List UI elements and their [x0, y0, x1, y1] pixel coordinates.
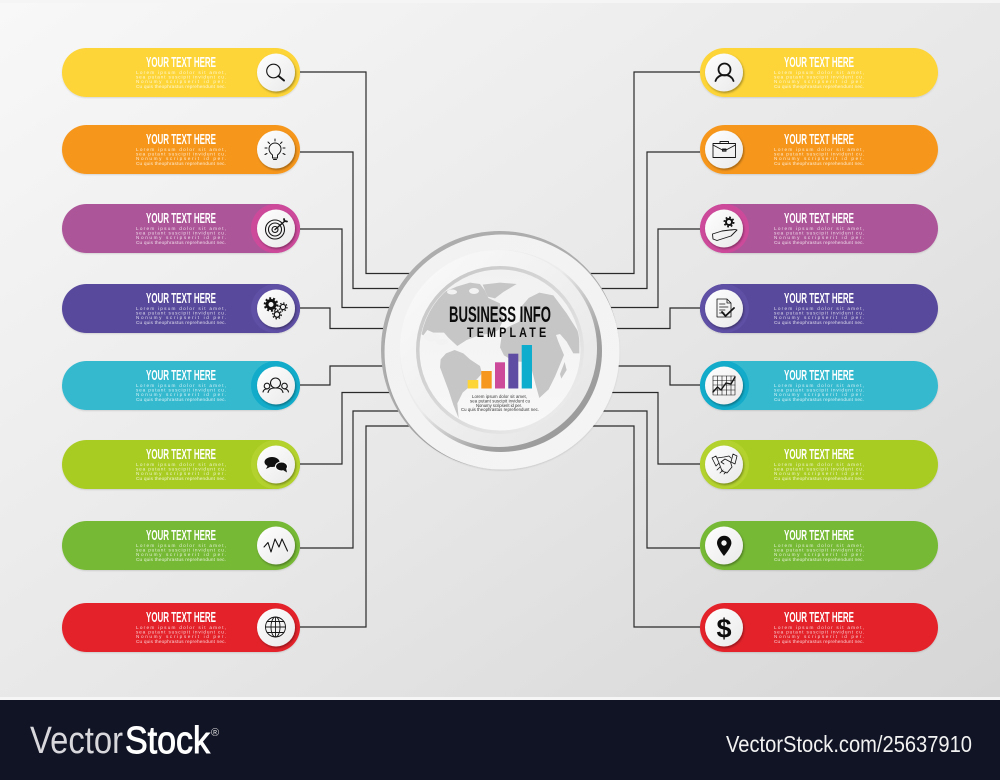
panel: left 7 green: [62, 521, 300, 570]
icon: user: [716, 64, 734, 81]
icon: line graph: [264, 539, 288, 552]
panel: left 1 yellow: Lorem ipsum dolor sit amet,: [136, 70, 226, 75]
footer bar: [0, 700, 1000, 780]
panel: left 3 purple: Cu quis theophrastus reprehendunt nec.: [136, 240, 226, 245]
panel: right 5 teal: Nonumy scripserit id per.: [774, 392, 864, 397]
panel: right 5 teal: YOUR TEXT HERE: [784, 367, 854, 384]
panel: left 4 indigo: Nonumy scripserit id per.: [136, 315, 226, 320]
panel: left 5 teal: Nonumy scripserit id per.: [136, 392, 226, 397]
panel: right 6 lime: [700, 440, 938, 489]
caption: [461, 394, 539, 412]
icon: gears: [265, 298, 287, 319]
icon: dollar sign: $: [716, 614, 732, 644]
registered mark: ®: [211, 727, 219, 739]
panel: left 7 green: Cu quis theophrastus reprehendunt nec.: [136, 557, 226, 562]
panel: left 3 purple: Nonumy scripserit id per.: [136, 235, 226, 240]
connector lines: left: [300, 72, 410, 627]
panel: left 6 lime: Cu quis theophrastus reprehendunt nec.: [136, 476, 226, 481]
panel: left 1 yellow: [62, 48, 300, 97]
panel: right 4 indigo: Lorem ipsum dolor sit amet,: [774, 306, 864, 311]
panel: left 4 indigo: Cu quis theophrastus reprehendunt nec.: [136, 320, 226, 325]
panel: left 6 lime: Nonumy scripserit id per.: [136, 471, 226, 476]
panel: right 2 orange: Cu quis theophrastus reprehendunt nec.: [774, 161, 864, 166]
panel: right 1 yellow: YOUR TEXT HERE: [784, 54, 854, 71]
caption: Nonumy scripserit id per.: [476, 403, 522, 408]
panel: right 3 purple: Lorem ipsum dolor sit amet,: [774, 226, 864, 231]
central hub: [381, 231, 620, 470]
panel: left 2 orange: YOUR TEXT HERE: [146, 131, 216, 148]
panel: left 4 indigo: sea putant suscipit invidunt cu.: [136, 310, 226, 316]
panel: left 3 purple: YOUR TEXT HERE: [146, 210, 216, 227]
panel: right 7 green: Lorem ipsum dolor sit amet,: [774, 543, 864, 548]
panel: left 4 indigo: [62, 284, 300, 333]
panel: left 8 red: Nonumy scripserit id per.: [136, 634, 226, 639]
panel: right 7 green: Cu quis theophrastus reprehendunt nec.: [774, 557, 864, 562]
caption: Lorem ipsum dolor sit amet,: [472, 394, 527, 399]
panel: left 2 orange: [62, 125, 300, 174]
panel: left 4 indigo: YOUR TEXT HERE: [146, 290, 216, 307]
map highlights: [447, 288, 479, 294]
panel: left 8 red: YOUR TEXT HERE: [146, 609, 216, 626]
panel: left 2 orange: Lorem ipsum dolor sit amet,: [136, 147, 226, 152]
panel: right 6 lime: Nonumy scripserit id per.: [774, 471, 864, 476]
panel: right 2 orange: Lorem ipsum dolor sit amet,: [774, 147, 864, 152]
panel: left 3 purple: sea putant suscipit invidunt cu.: [136, 230, 226, 236]
panel: right 5 teal: [700, 361, 938, 410]
panel: right 6 lime: Cu quis theophrastus reprehendunt nec.: [774, 476, 864, 481]
panel: left 5 teal: Cu quis theophrastus reprehendunt nec.: [136, 397, 226, 402]
panel: left 2 orange: Cu quis theophrastus reprehendunt nec.: [136, 161, 226, 166]
panel: left 2 orange: Nonumy scripserit id per.: [136, 156, 226, 161]
panel: left 5 teal: Lorem ipsum dolor sit amet,: [136, 383, 226, 388]
icon: people: [263, 378, 288, 392]
panel: right 4 indigo: YOUR TEXT HERE: [784, 290, 854, 307]
icon: light bulb: [265, 139, 285, 160]
panel: right 4 indigo: [700, 284, 938, 333]
icon: target: [266, 219, 287, 239]
footer url: VectorStock.com/25637910: [726, 731, 972, 757]
panel: right 4 indigo: Cu quis theophrastus reprehendunt nec.: [774, 320, 864, 325]
panel: left 8 red: Lorem ipsum dolor sit amet,: [136, 625, 226, 630]
panel: left 1 yellow: Cu quis theophrastus reprehendunt nec.: [136, 84, 226, 89]
icon: chat bubbles: [264, 457, 288, 472]
connector lines: right: [590, 72, 700, 627]
panel: left 5 teal: [62, 361, 300, 410]
panel: left 7 green: YOUR TEXT HERE: [146, 527, 216, 544]
icon: handshake: [712, 454, 737, 474]
icon: hand with gear: [712, 217, 737, 240]
panel: right 1 yellow: Lorem ipsum dolor sit amet,: [774, 70, 864, 75]
panel: right 1 yellow: sea putant suscipit invidunt cu.: [774, 74, 864, 80]
panel: left 6 lime: Lorem ipsum dolor sit amet,: [136, 462, 226, 467]
panel: left 6 lime: [62, 440, 300, 489]
panel: left 2 orange: sea putant suscipit invidunt cu.: [136, 152, 226, 156]
panel: right 2 orange: YOUR TEXT HERE: [784, 131, 854, 148]
panel: left 1 yellow: YOUR TEXT HERE: [146, 54, 216, 71]
panel: right 2 orange: [700, 125, 938, 174]
panel: left 8 red: [62, 603, 300, 652]
icon: magnifier: [267, 64, 284, 80]
bar chart: [468, 345, 532, 388]
caption: Cu quis theophrastus reprehendunt nec.: [461, 407, 539, 412]
title: BUSINESS INFO: [449, 302, 551, 327]
panel: right 1 yellow: [700, 48, 938, 97]
panel: right 2 orange: sea putant suscipit invidunt cu.: [774, 152, 864, 156]
panel: right 7 green: sea putant suscipit invidunt cu.: [774, 548, 864, 552]
panel: left 7 green: sea putant suscipit invidunt cu.: [136, 548, 226, 552]
panel: right 8 red: YOUR TEXT HERE: [784, 609, 854, 626]
panel: left 5 teal: YOUR TEXT HERE: [146, 367, 216, 384]
panel: right 8 red: Nonumy scripserit id per.: [774, 634, 864, 639]
panel: right 8 red: [700, 603, 938, 652]
panel: left 5 teal: sea putant suscipit invidunt cu.: [136, 388, 226, 392]
panel: right 8 red: Lorem ipsum dolor sit amet,: [774, 625, 864, 630]
panel: left 1 yellow: Nonumy scripserit id per.: [136, 79, 226, 84]
caption: sea putant suscipit invidunt cu: [470, 398, 531, 404]
panel: left 7 green: Lorem ipsum dolor sit amet,: [136, 543, 226, 548]
panel: left 8 red: Cu quis theophrastus reprehendunt nec.: [136, 639, 226, 644]
panel: left 6 lime: sea putant suscipit invidunt cu.: [136, 466, 226, 472]
panel: right 8 red: Cu quis theophrastus reprehendunt nec.: [774, 639, 864, 644]
panel: right 6 lime: Lorem ipsum dolor sit amet,: [774, 462, 864, 467]
footer logo: Stock: Stock: [125, 720, 211, 762]
panel: right 4 indigo: Nonumy scripserit id per.: [774, 315, 864, 320]
icon: briefcase: [713, 142, 736, 158]
panel: left 3 purple: [62, 204, 300, 253]
panel: right 1 yellow: Nonumy scripserit id per.: [774, 79, 864, 84]
panel: left 8 red: sea putant suscipit invidunt cu.: [136, 630, 226, 634]
inner grey crescent: [400, 250, 602, 452]
panel: right 7 green: YOUR TEXT HERE: [784, 527, 854, 544]
panel: left 3 purple: Lorem ipsum dolor sit amet,: [136, 226, 226, 231]
panel: right 5 teal: Lorem ipsum dolor sit amet,: [774, 383, 864, 388]
panel: left 4 indigo: Lorem ipsum dolor sit amet,: [136, 306, 226, 311]
panel: right 3 purple: Cu quis theophrastus reprehendunt nec.: [774, 240, 864, 245]
footer logo: Vector: Vector: [30, 720, 123, 762]
panel: right 2 orange: Nonumy scripserit id per.: [774, 156, 864, 161]
icon: map pin: [717, 536, 731, 556]
world map: [420, 283, 579, 418]
icon: globe: [266, 617, 286, 637]
panel: left 7 green: Nonumy scripserit id per.: [136, 552, 226, 557]
panel: right 4 indigo: sea putant suscipit invidunt cu.: [774, 310, 864, 316]
panel: right 7 green: Nonumy scripserit id per.: [774, 552, 864, 557]
icon: chart grid: [713, 376, 735, 395]
panel: right 3 purple: Nonumy scripserit id per.: [774, 235, 864, 240]
subtitle: TEMPLATE: [467, 325, 549, 340]
panel: right 8 red: sea putant suscipit invidunt cu.: [774, 630, 864, 634]
panel: right 1 yellow: Cu quis theophrastus reprehendunt nec.: [774, 84, 864, 89]
panel: right 3 purple: YOUR TEXT HERE: [784, 210, 854, 227]
panel: right 6 lime: sea putant suscipit invidunt cu.: [774, 466, 864, 472]
panel: left 6 lime: YOUR TEXT HERE: [146, 446, 216, 463]
outer grey crescent: [381, 231, 619, 469]
panel: left 1 yellow: sea putant suscipit invidunt cu.: [136, 74, 226, 80]
panel: right 3 purple: sea putant suscipit invidunt cu.: [774, 230, 864, 236]
panel: right 7 green: [700, 521, 938, 570]
panel: right 5 teal: sea putant suscipit invidunt cu.: [774, 388, 864, 392]
icon: checklist document: [717, 299, 734, 317]
globe ring: [416, 266, 584, 434]
panel: right 6 lime: YOUR TEXT HERE: [784, 446, 854, 463]
panel: right 5 teal: Cu quis theophrastus reprehendunt nec.: [774, 397, 864, 402]
panel: right 3 purple: [700, 204, 938, 253]
